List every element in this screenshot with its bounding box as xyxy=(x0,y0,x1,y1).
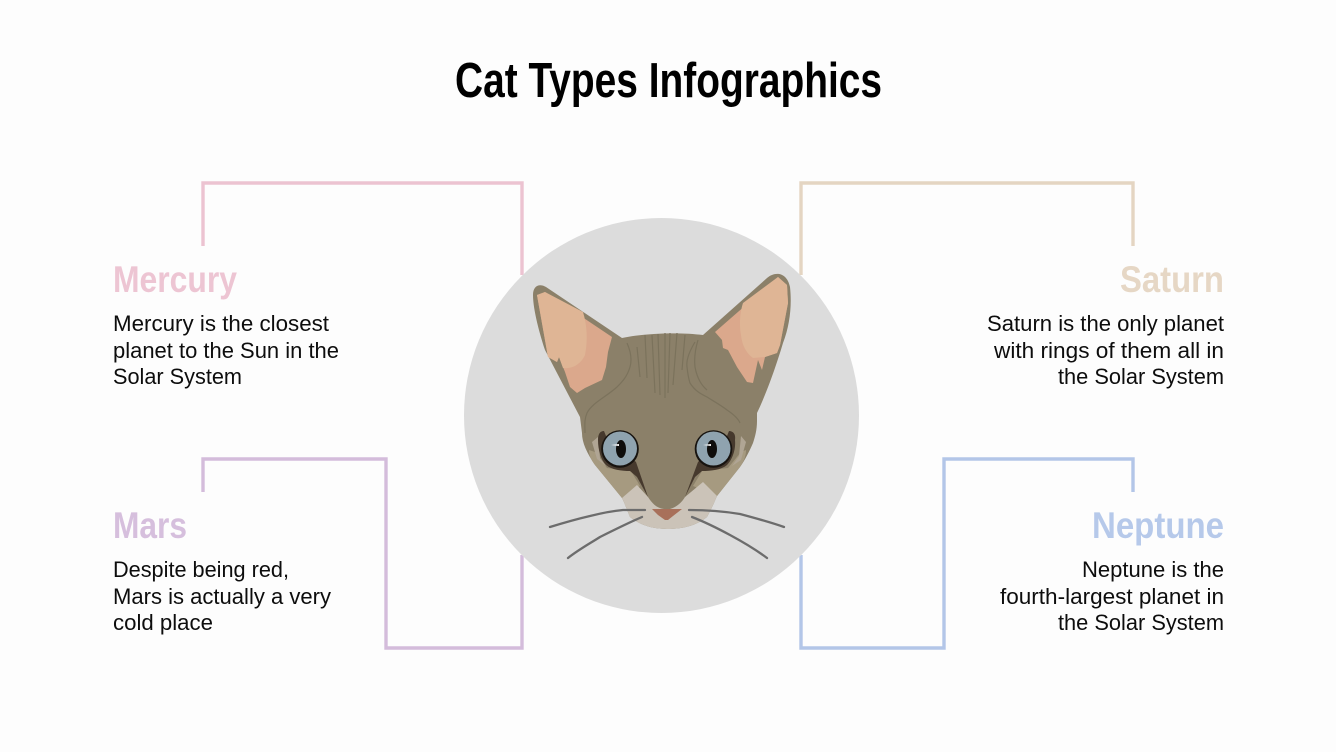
panel: Saturn xyxy=(987,259,1224,389)
panel: Mars xyxy=(113,505,331,635)
circle backdrop xyxy=(464,218,859,613)
text block: Saturn description xyxy=(987,311,1224,389)
whiskers xyxy=(550,510,784,558)
text block: Mercury description: planet to the Sun in the xyxy=(113,338,339,363)
right eye xyxy=(695,430,732,468)
right ear inner xyxy=(715,277,788,383)
text block: Neptune description xyxy=(1000,557,1224,635)
text block: Neptune description: the Solar System xyxy=(1058,610,1224,635)
text block: Saturn description: the Solar System xyxy=(1058,364,1224,389)
eye side patches xyxy=(592,436,746,466)
connector: Mars xyxy=(203,459,522,648)
dark eye markings xyxy=(598,431,648,497)
nose xyxy=(652,509,682,520)
cheek shading left xyxy=(589,450,640,498)
cheek shading right xyxy=(693,450,746,496)
text block: Saturn description: with rings of them all in xyxy=(993,338,1224,363)
head silhouette xyxy=(533,274,791,529)
muzzle xyxy=(622,482,717,529)
text block: Neptune description: Neptune is the xyxy=(1082,557,1224,582)
connector: Neptune xyxy=(801,459,1133,648)
connector: Saturn xyxy=(801,183,1133,275)
heading: Saturn: Saturn xyxy=(1120,259,1224,300)
text block: Mercury description xyxy=(113,311,339,389)
text block: Mercury description: Mercury is the closest xyxy=(113,311,329,336)
left eye xyxy=(601,430,639,468)
icon: cat head xyxy=(533,274,791,558)
left ear inner xyxy=(537,292,612,393)
text block: Neptune description: fourth-largest planet in xyxy=(1000,584,1224,609)
text block: Mercury description: Solar System xyxy=(113,364,242,389)
panel: Mercury xyxy=(113,259,339,389)
panel: Neptune xyxy=(1000,505,1224,635)
forehead wrinkles xyxy=(585,333,740,433)
heading: Neptune: Neptune xyxy=(1092,505,1224,546)
heading: Mercury: Mercury xyxy=(113,259,237,300)
title: Cat Types Infographics xyxy=(455,54,882,108)
heading: Mars: Mars xyxy=(113,505,187,546)
connector: Mercury xyxy=(203,183,522,275)
text block: Mars description: cold place xyxy=(113,610,213,635)
text block: Mars description: Mars is actually a very xyxy=(113,584,331,609)
text block: Saturn description: Saturn is the only planet xyxy=(987,311,1224,336)
text block: Mars description: Despite being red, xyxy=(113,557,289,582)
text block: Mars description xyxy=(113,557,331,635)
